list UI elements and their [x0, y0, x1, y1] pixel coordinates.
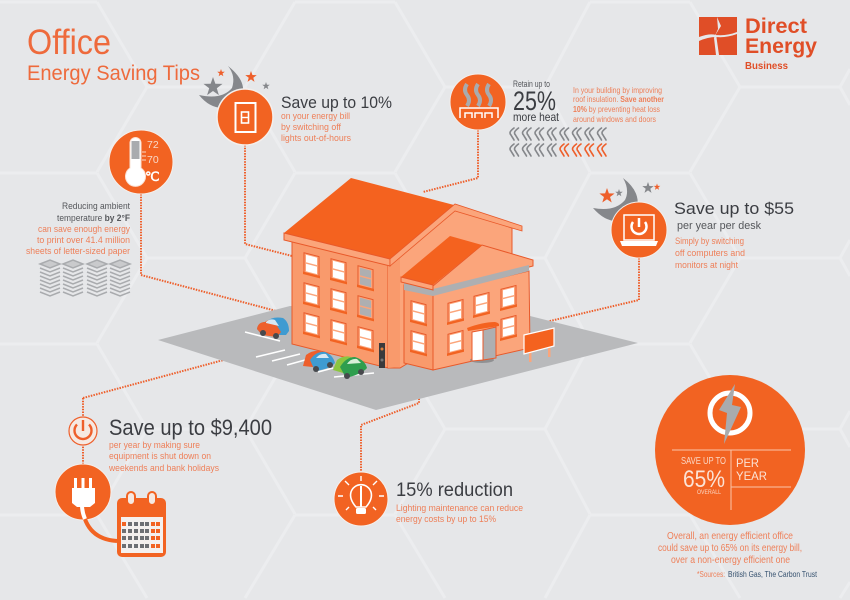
icon: thermometer [109, 130, 173, 194]
title: Office [27, 23, 111, 62]
tip: reducing temperature [26, 130, 173, 296]
icon: light bulb [334, 472, 388, 526]
tip: retain up to 25% more heat: Retain up to [513, 79, 550, 90]
car: orange and blue [257, 318, 289, 339]
panel: overall savings: YEAR [736, 469, 767, 483]
door [467, 322, 499, 363]
tip: retain up to 25% more heat [450, 74, 665, 156]
tip: save up to $9,400: Save up to $9,400 [109, 415, 272, 440]
icon: thermometer: 70 [147, 154, 159, 166]
tip: save up to $55: monitors at night [675, 260, 738, 271]
tip: save up to 10%: lights out-of-hours [281, 133, 351, 144]
sign board [524, 328, 554, 362]
tip: reducing temperature: to print over 41.4 million [37, 235, 130, 246]
icon: light switch [217, 89, 273, 145]
summary text [658, 531, 802, 566]
tip: reducing temperature: Reducing ambient [62, 201, 130, 212]
tip: 15% reduction [334, 472, 523, 526]
wing windows [410, 285, 517, 356]
panel: overall savings: OVERALL [697, 490, 722, 496]
sources [697, 570, 818, 579]
building scene [158, 178, 638, 410]
tip: retain up to 25% more heat: more heat [513, 110, 560, 124]
summary text: over a non-energy efficient one [671, 555, 790, 566]
icon: power button [69, 417, 97, 445]
main roof [284, 178, 454, 259]
tip: save up to $9,400: weekends and bank holidays [108, 463, 219, 474]
tip: save up to 10%: Save up to 10% [281, 94, 392, 112]
icon: moon and stars [199, 66, 270, 108]
title: Energy Saving Tips [27, 62, 200, 85]
parking lines [245, 332, 374, 377]
tip: retain up to 25% more heat: roof insulation. Save another [573, 94, 665, 104]
tip: save up to $55: Simply by switching [675, 236, 744, 247]
tip: reducing temperature: can save enough energy [38, 224, 130, 235]
tip: save up to $9,400: equipment is shut down on [109, 451, 211, 462]
icon: thermometer: 72 [147, 139, 159, 151]
tip: reducing temperature: sheets of letter-sized paper [26, 246, 130, 257]
icon: laptop [611, 202, 667, 258]
panel: overall savings: 65% [683, 466, 725, 493]
summary text: Overall, an energy efficient office [667, 531, 793, 542]
summary text: could save up to 65% on its energy bill, [658, 543, 802, 554]
car: green [333, 356, 367, 379]
main block [292, 208, 512, 368]
ground [158, 306, 638, 410]
icon: roof heat [450, 74, 506, 130]
logo: Direct Energy Business: Energy [745, 35, 817, 58]
main windows [303, 252, 374, 352]
tip: save up to 10%: by switching off [281, 122, 341, 133]
icon: thermometer: ℃ [145, 169, 160, 184]
tip: reducing temperature: temperature by 2°F [57, 213, 130, 224]
icon: lightning power [710, 384, 750, 444]
tip: save up to $55: per year per desk [677, 220, 761, 232]
connector lines [83, 130, 639, 472]
tip: save up to $9,400: per year by making sure [109, 440, 200, 451]
tip: retain up to 25% more heat: 25% [513, 86, 556, 116]
car: blue and orange [303, 351, 335, 372]
panel: overall savings: PER [736, 456, 759, 470]
logo: Direct Energy Business: Business [745, 60, 788, 72]
icon: plug [55, 464, 117, 541]
tip: save up to 10%: on your energy bill [281, 111, 350, 122]
tip: 15% reduction: 15% reduction [396, 480, 513, 501]
sources: British Gas, The Carbon Trust [728, 570, 818, 579]
tip: retain up to 25% more heat: around windows and doors [573, 114, 656, 124]
icon: paper stacks [40, 260, 130, 296]
panel: overall savings: SAVE UP TO [681, 456, 726, 467]
tip: save up to 10% [199, 66, 392, 145]
traffic light [379, 343, 385, 368]
title [27, 23, 200, 85]
tip: save up to $9,400 [55, 415, 272, 557]
tip: save up to $55: off computers and [675, 248, 745, 259]
tip: save up to $55 [593, 178, 794, 271]
tip: retain up to 25% more heat: 10% by preventing heat loss [573, 104, 660, 114]
icon: moon and stars [593, 178, 660, 221]
tip: 15% reduction: Lighting maintenance can reduce [396, 503, 523, 514]
tip: 15% reduction: energy costs by up to 15% [396, 514, 496, 525]
icon: heat squiggles [510, 128, 606, 156]
tip: save up to $55: Save up to $55 [674, 199, 794, 218]
logo: Direct Energy Business [699, 15, 817, 72]
panel: overall savings [655, 375, 805, 525]
sources: *Sources: [697, 570, 725, 579]
tip: retain up to 25% more heat: In your building by improving [573, 85, 662, 95]
logo: Direct Energy Business: Direct [745, 15, 807, 38]
icon: calendar [117, 492, 166, 557]
front wing [401, 236, 533, 370]
